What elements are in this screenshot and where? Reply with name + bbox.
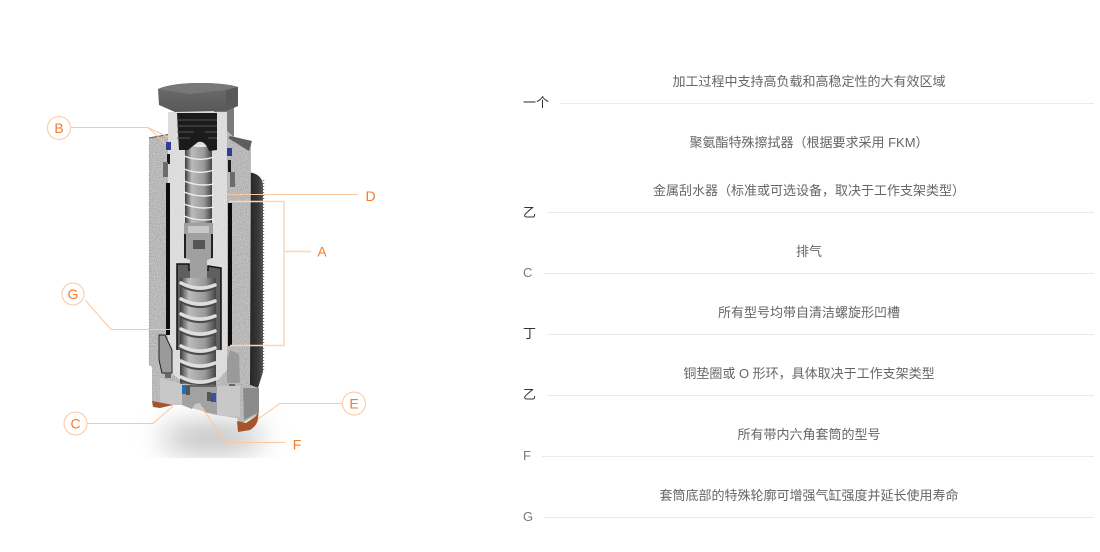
lower chamber [177,264,221,350]
row B description 2: 金属刮水器（标准或可选设备，取决于工作支架类型） [653,183,965,198]
ground shadow [160,424,264,452]
callout G [62,283,84,305]
bottom plug [160,378,240,417]
copper washers [152,401,173,408]
row E description: 铜垫圈或 O 形环，具体取决于工作支架类型 [683,366,935,381]
callout F: F [293,436,301,452]
row G description: 套筒底部的特殊轮廓可增强气缸强度并延长使用寿命 [659,488,958,503]
body section [149,130,259,424]
cylinder illustration [149,83,264,432]
upper cavity with spring [185,146,212,224]
callout D: D [365,188,376,204]
row D label: 丁 [523,326,536,341]
row B description 1: 聚氨酯特殊擦拭器（根据要求采用 FKM） [689,135,929,150]
row F description: 所有带内六角套筒的型号 [737,427,880,442]
bolt shank [214,108,234,140]
callout B [48,116,70,140]
external thread [248,172,263,388]
lower outer parts [243,388,259,420]
callout E: E [349,396,359,412]
callout E [342,392,366,415]
callout A: A [317,244,327,260]
callout C [64,412,87,435]
row A label: 一个 [523,95,549,110]
row C description: 排气 [796,244,822,259]
row G label: G [523,509,533,524]
shoulder [228,136,252,151]
bolt head [158,83,238,112]
row B label: 乙 [523,205,536,220]
threaded bore [177,113,217,151]
row F label: F [523,448,531,463]
lower wedges [159,335,172,373]
slits [166,183,170,335]
piston [184,223,213,284]
row A description: 加工过程中支持高负载和高稳定性的大有效区域 [672,74,946,89]
callout lines [71,128,358,442]
lower spring [181,286,215,385]
row C label: C [523,265,532,280]
callout G: G [68,286,78,302]
plug seals [182,385,186,394]
row E label: 乙 [523,387,536,402]
callout A bracket [229,202,311,346]
inner sleeve [168,112,227,380]
callout C: C [70,416,81,432]
row D description: 所有型号均带自清洁螺旋形凹槽 [718,305,900,320]
seals [166,142,171,150]
diagram: cylinder cutaway with callouts [47,83,376,458]
callout B: B [54,120,64,136]
